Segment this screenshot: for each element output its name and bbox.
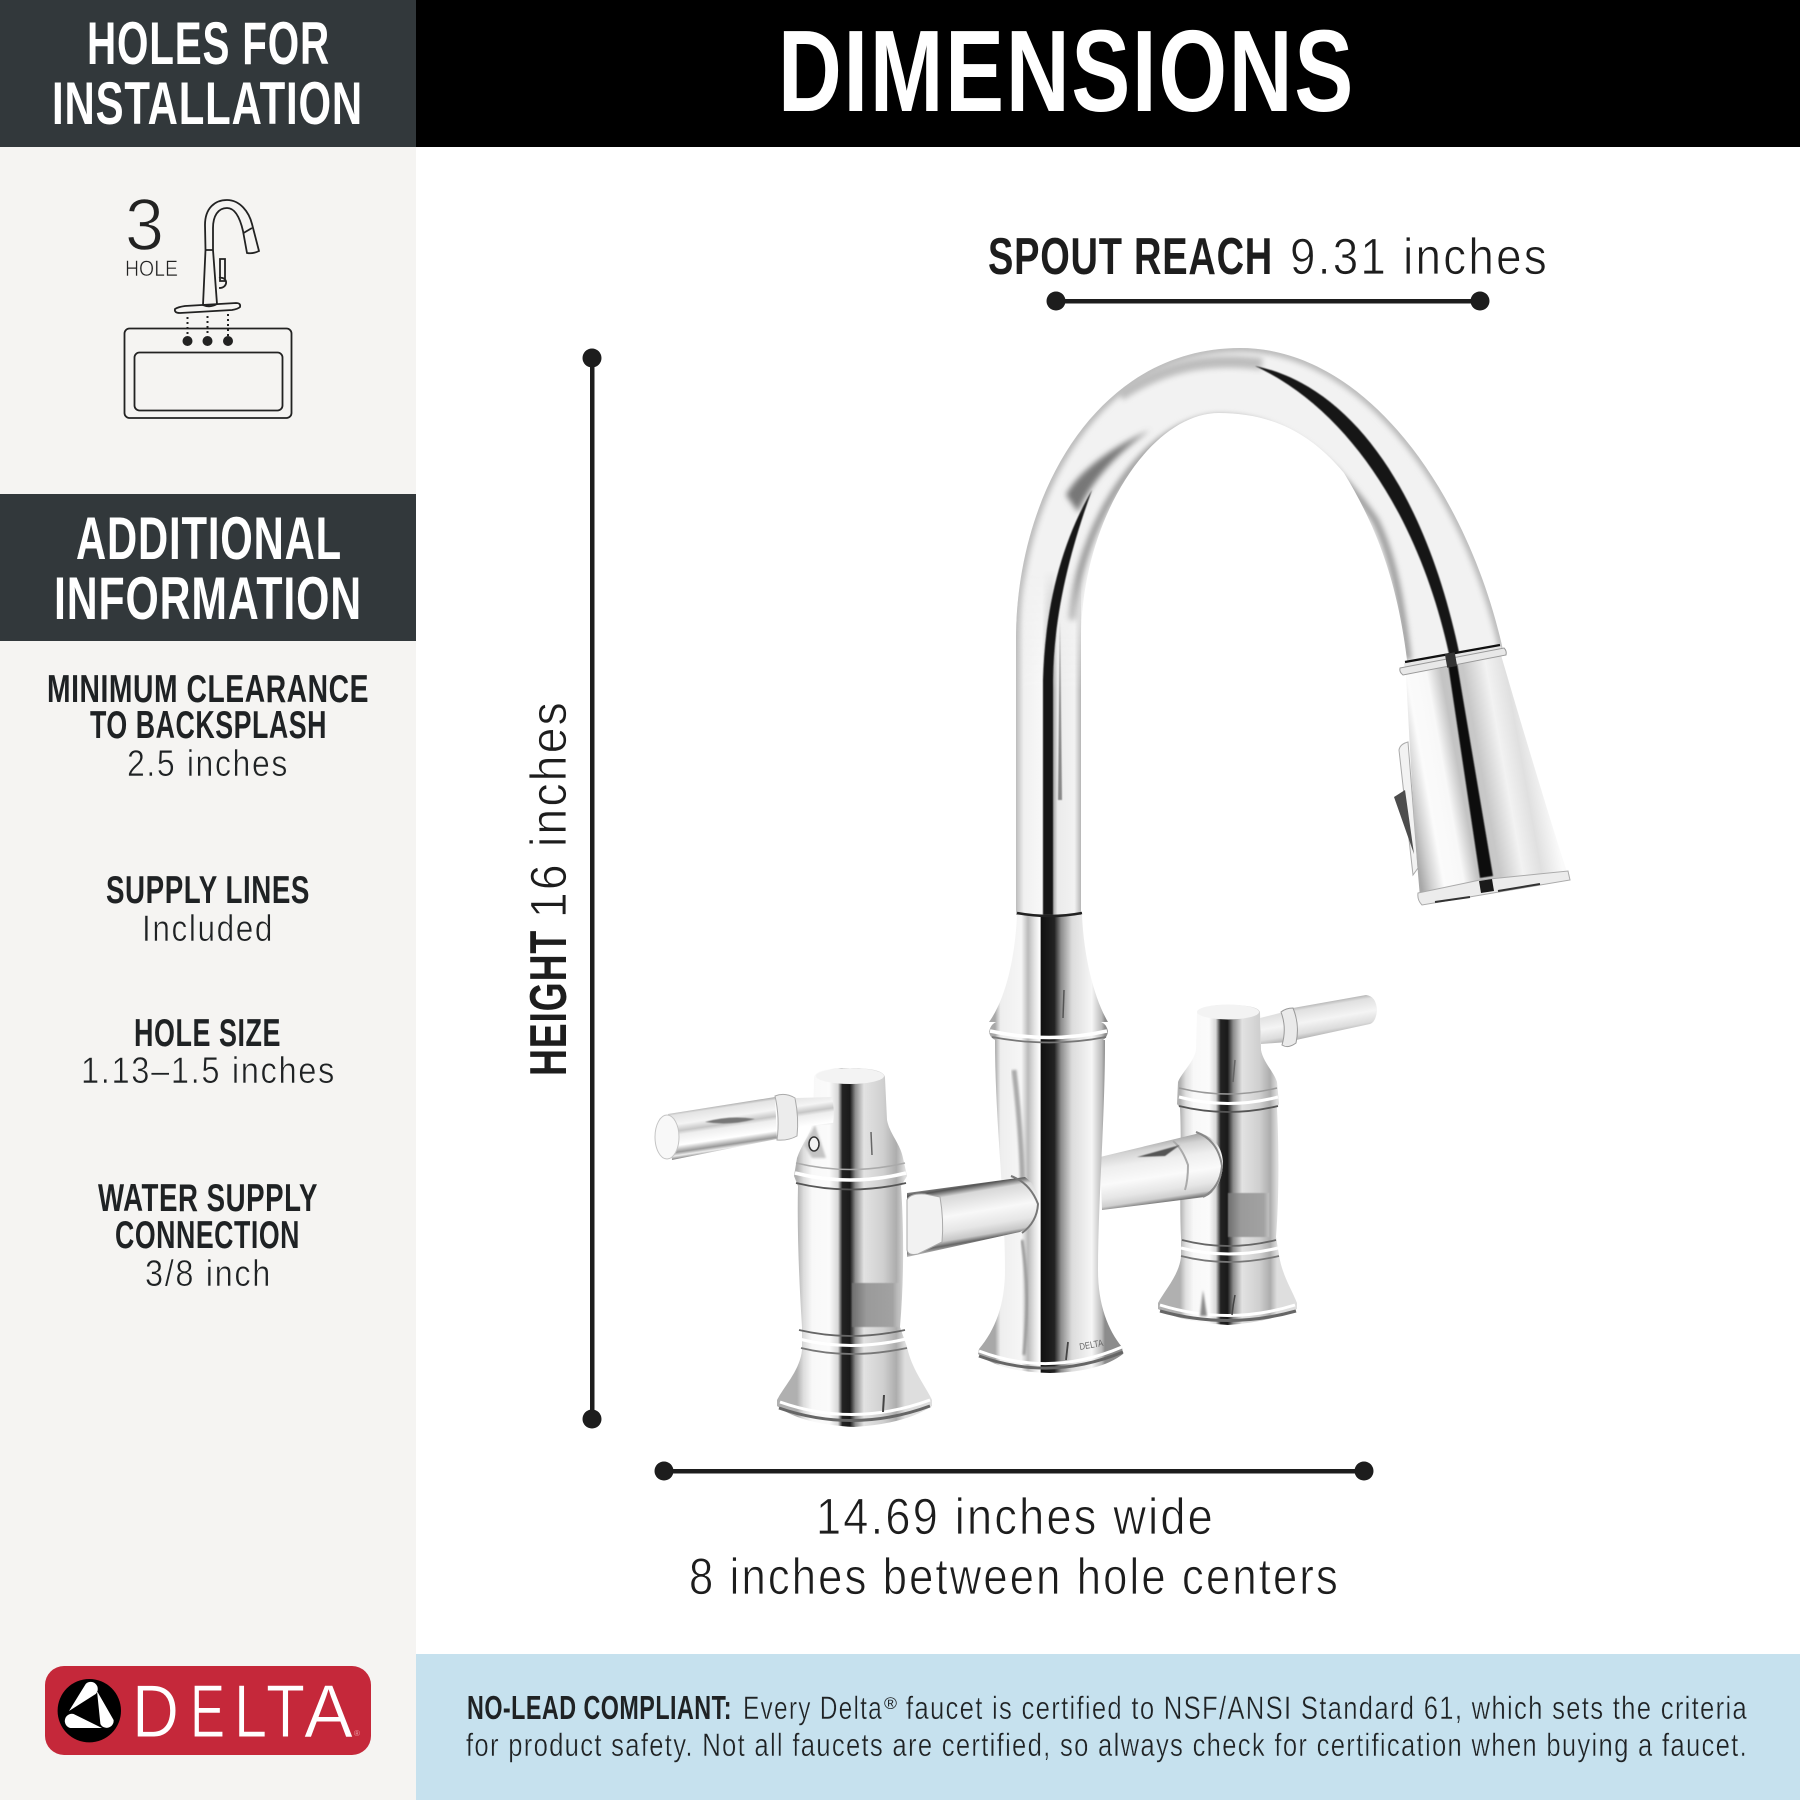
logo: delta: D	[132, 1669, 179, 1753]
panel: holes for installation	[0, 0, 416, 418]
left bridge arm	[907, 1176, 1038, 1257]
spray head button	[1394, 742, 1418, 875]
heading: holes for installation	[52, 10, 363, 137]
logo: delta: L	[234, 1669, 267, 1753]
measure: width	[654, 1462, 1374, 1605]
measure: height: HEIGHT	[520, 930, 578, 1076]
callout: no-lead compliant	[416, 1654, 1800, 1800]
center column base lip	[979, 1342, 1123, 1368]
heading: holes for installation: HOLES FOR	[87, 10, 330, 77]
right lever	[1260, 995, 1377, 1047]
brand mark on base: DELTA	[1079, 1338, 1105, 1353]
left lever	[655, 1094, 834, 1160]
left handle	[777, 1068, 932, 1427]
icon: three hole sink with faucet	[124, 185, 292, 418]
logo: delta: T	[266, 1669, 305, 1753]
spec: minimum clearance	[47, 668, 369, 784]
pull-down spray head	[1400, 645, 1570, 905]
logo: delta: ®	[354, 1729, 360, 1738]
sidebar background panel	[0, 0, 416, 1800]
panel: additional information	[0, 494, 416, 1294]
heading: additional information: INFORMATION	[54, 565, 362, 632]
spec: minimum clearance: MINIMUM CLEARANCE	[47, 668, 369, 711]
spout collar joint	[1017, 913, 1082, 916]
product: chrome bridge faucet	[655, 348, 1570, 1427]
top title bar	[416, 0, 1800, 147]
spec: supply lines	[106, 869, 310, 949]
logo: delta: A	[304, 1669, 353, 1753]
icon: three hole sink with faucet: 3	[125, 185, 164, 266]
spec: hole size	[81, 1012, 336, 1091]
spec: hole size: HOLE SIZE	[134, 1012, 281, 1055]
spec: hole size: 1.13–1.5 inches	[81, 1050, 336, 1091]
measure: spout reach: 9.31 inches	[1290, 228, 1549, 285]
heading: additional information	[54, 505, 362, 632]
logo: delta	[45, 1666, 371, 1755]
callout: no-lead compliant: NO-LEAD COMPLIANT:	[467, 1689, 732, 1726]
title: dimensions: DIMENSIONS	[778, 6, 1355, 136]
spout tube	[1016, 348, 1503, 916]
measure: spout reach: SPOUT REACH	[988, 228, 1273, 286]
right bridge arm	[1100, 1132, 1223, 1210]
center column body	[978, 1040, 1123, 1373]
spec: supply lines: Included	[142, 908, 274, 949]
spec: water supply connection: WATER SUPPLY	[98, 1177, 318, 1220]
center column collar	[989, 990, 1108, 1042]
spec: water supply connection: 3/8 inch	[145, 1253, 272, 1294]
right handle	[1158, 1004, 1297, 1325]
measure: height: 16 inches	[520, 700, 577, 918]
spec: minimum clearance: 2.5 inches	[127, 743, 289, 784]
spec: minimum clearance: TO BACKSPLASH	[90, 704, 327, 747]
icon: three hole sink with faucet: HOLE	[125, 256, 178, 281]
spec: water supply connection: CONNECTION	[115, 1214, 300, 1257]
measure: width: 8 inches between hole centers	[689, 1548, 1340, 1605]
spec: water supply connection	[98, 1177, 318, 1294]
callout: no-lead compliant: Every Delta	[743, 1690, 883, 1726]
callout: no-lead compliant: ®	[884, 1694, 897, 1713]
heading: additional information: ADDITIONAL	[76, 505, 342, 572]
heading: holes for installation: INSTALLATION	[52, 70, 363, 137]
logo: delta: E	[190, 1669, 225, 1753]
measure: spout reach	[988, 228, 1549, 310]
measure: width: 14.69 inches wide	[816, 1488, 1215, 1545]
spec: supply lines: SUPPLY LINES	[106, 869, 310, 912]
center column neck	[989, 915, 1108, 1022]
measure: height	[520, 348, 602, 1428]
